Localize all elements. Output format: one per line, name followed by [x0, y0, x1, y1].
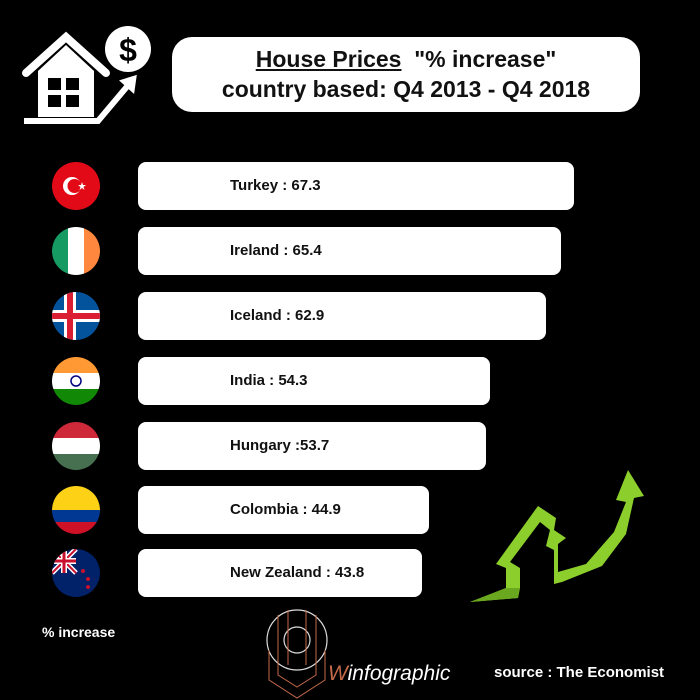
bar: Ireland: Ireland : 65.4 — [230, 242, 322, 259]
bar: India: India : 54.3 — [230, 372, 308, 389]
legend label: % increase — [42, 624, 115, 640]
icon: green house arrow — [470, 470, 644, 602]
bar: Hungary: Hungary :53.7 — [230, 437, 329, 454]
flag: Hungary — [52, 422, 100, 470]
bar: Turkey: Turkey : 67.3 — [230, 177, 321, 194]
icon: house with dollar: $ — [119, 32, 137, 68]
bar: Turkey — [138, 162, 574, 210]
bar: Iceland: Iceland : 62.9 — [230, 307, 324, 324]
logo: Winfographic: Winfographic — [328, 662, 450, 685]
bar: Iceland — [138, 292, 546, 340]
bar: Colombia — [138, 486, 429, 534]
flag: Colombia — [52, 486, 100, 534]
bar: India — [138, 357, 490, 405]
bar: Hungary — [138, 422, 486, 470]
flag: Iceland — [52, 292, 100, 340]
flag: Ireland — [52, 227, 100, 275]
source: source : The Economist — [494, 664, 664, 681]
title — [172, 37, 640, 112]
flag: Turkey — [52, 162, 100, 210]
bar: New Zealand: New Zealand : 43.8 — [230, 564, 364, 581]
bar: New Zealand — [138, 549, 422, 597]
flag: India — [52, 357, 100, 405]
icon: house with dollar — [22, 26, 151, 124]
title: country based: Q4 2013 - Q4 2018 — [222, 76, 590, 102]
logo: Winfographic — [266, 609, 450, 699]
title: House Prices "% increase" — [256, 46, 556, 72]
bar: Ireland — [138, 227, 561, 275]
flag: New Zealand — [52, 549, 100, 597]
bar: Colombia: Colombia : 44.9 — [230, 501, 341, 518]
